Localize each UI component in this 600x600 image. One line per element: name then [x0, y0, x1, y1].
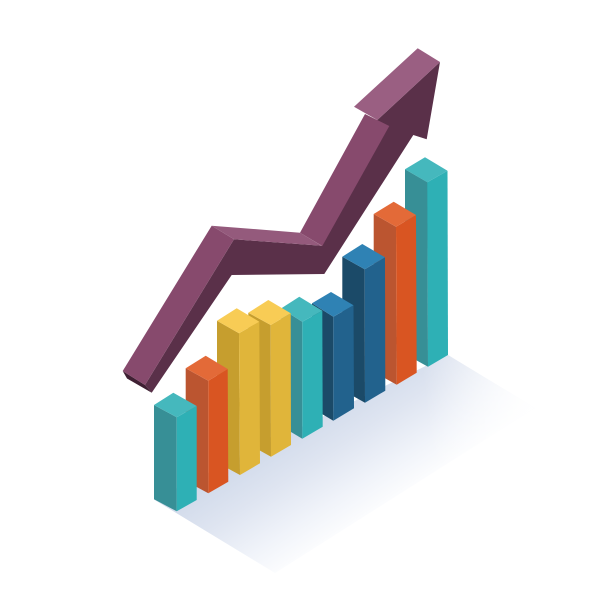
bar 5: teal: [281, 297, 323, 439]
arrow first segment: [123, 226, 234, 385]
arrow elbow top: [212, 226, 322, 246]
rising arrow: [123, 48, 440, 393]
floor shadow: [154, 355, 535, 573]
bar 4: yellow: [248, 300, 291, 457]
bar 8: orange: [374, 202, 417, 385]
bar 1: teal: [154, 393, 197, 511]
bar 7: dark blue: [342, 244, 385, 403]
bar 6: dark blue: [312, 292, 354, 421]
bar 2: orange: [186, 356, 228, 493]
bar 9: teal: [405, 157, 448, 367]
arrow dark side faces: [145, 62, 440, 393]
bar 3: yellow: [217, 308, 260, 475]
arrow tail end: [123, 371, 152, 393]
arrow second segment: [300, 114, 389, 246]
arrow head top: [354, 48, 440, 120]
